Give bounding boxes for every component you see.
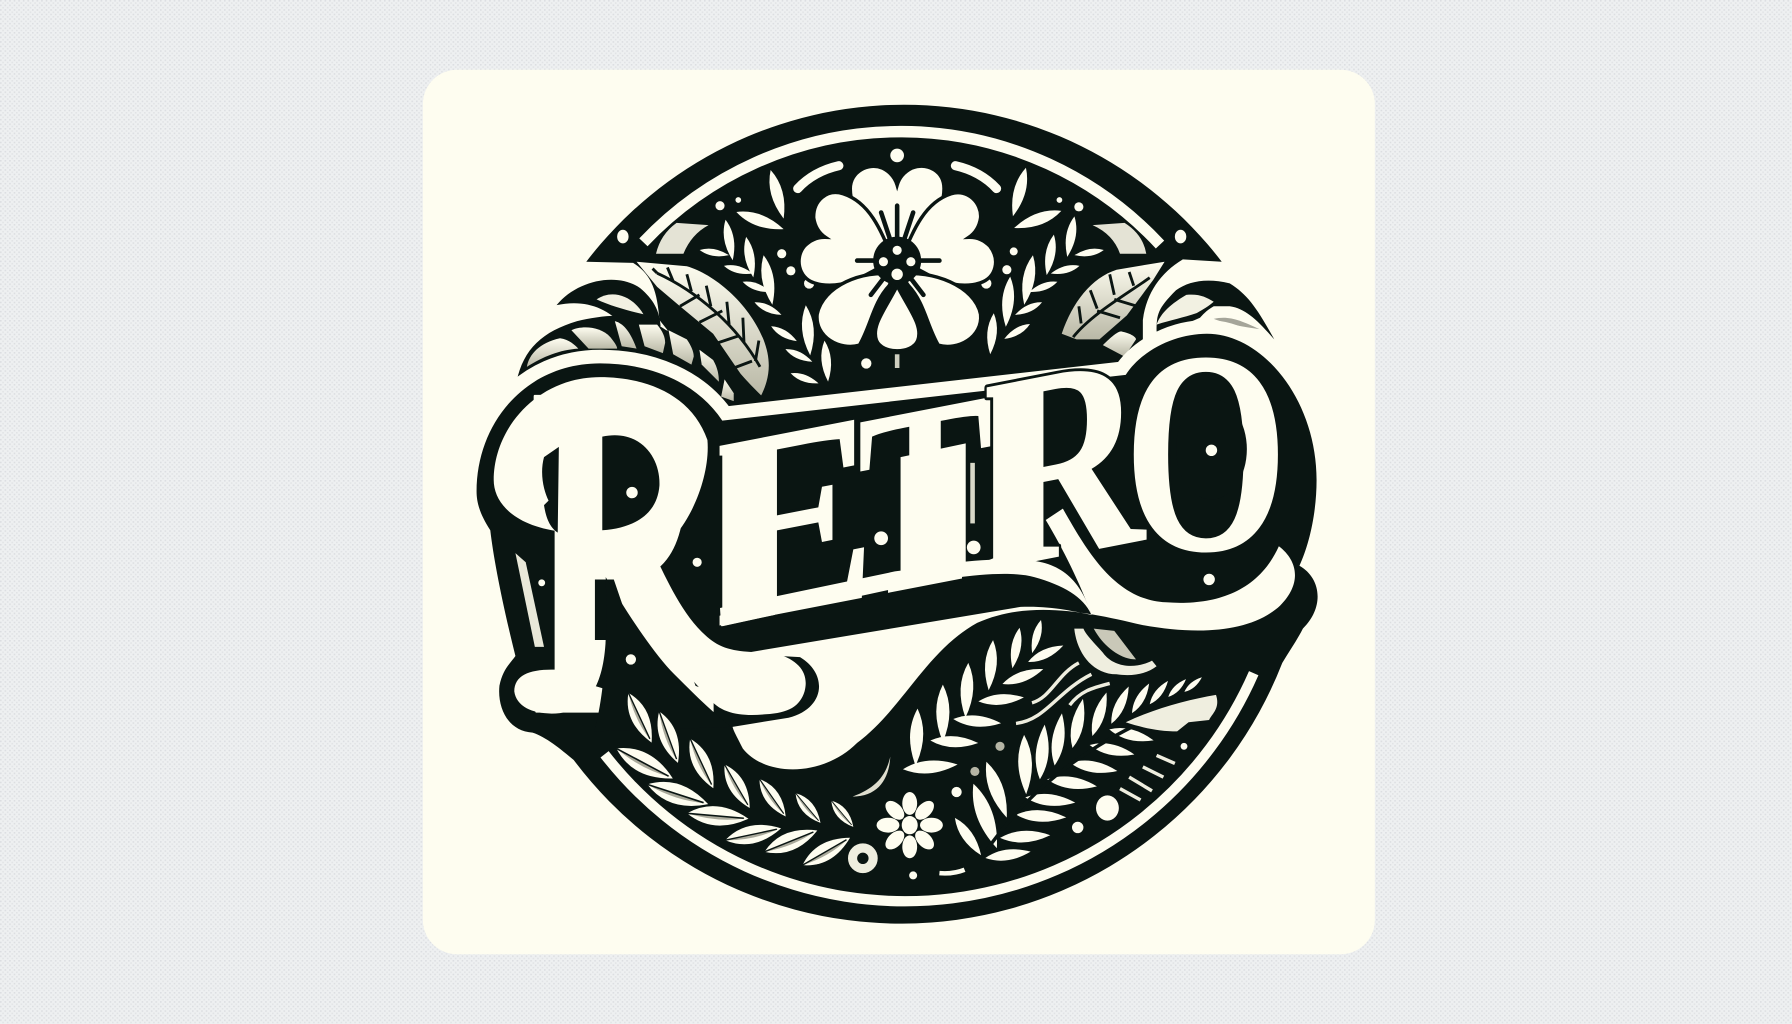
R counter	[602, 435, 659, 530]
wordmark RETRO: E	[715, 352, 876, 686]
bottom right feather	[951, 675, 1217, 863]
rope and leaf left	[517, 262, 769, 409]
wordmark RETRO: T	[857, 333, 993, 657]
crescent	[1074, 629, 1157, 675]
wordmark RETRO: R	[983, 291, 1147, 633]
R left sliver	[542, 447, 559, 533]
letter stem weights	[722, 385, 1043, 626]
top leaves left	[699, 169, 833, 387]
flourish: R top loop and foot curls	[494, 377, 806, 715]
bottom petal	[875, 286, 919, 351]
top leaves right	[985, 166, 1104, 355]
letter dots	[538, 487, 1215, 665]
dark letter silhouette with cream outline	[477, 334, 1318, 924]
top ornaments	[617, 149, 1186, 387]
cream card	[423, 70, 1375, 954]
top inner ring	[643, 132, 1160, 245]
top crescent	[557, 280, 661, 343]
bottom centre branch	[902, 619, 1065, 776]
wave under letters	[720, 560, 1091, 626]
large flower	[793, 166, 1001, 368]
hatched fans	[656, 223, 709, 254]
hatch and wavy lines	[1016, 663, 1175, 800]
wordmark RETRO: R	[530, 283, 714, 815]
slit between T and R	[970, 463, 975, 523]
small flower	[877, 792, 943, 858]
wordmark RETRO: O	[1123, 292, 1288, 613]
rope band	[517, 316, 737, 409]
bottom left branch	[612, 689, 857, 873]
stamens	[857, 206, 939, 295]
arc dashes	[798, 166, 997, 189]
frilled leaf tip	[1126, 695, 1217, 731]
bottom inner ring	[605, 673, 1254, 901]
left cream sliver	[515, 553, 544, 647]
flourish: swash tail under the wordmark	[733, 509, 1295, 769]
wordmark RETRO	[530, 283, 1288, 815]
top cap of badge	[586, 105, 1222, 425]
bottom ornaments	[853, 629, 1187, 879]
lower petals	[817, 274, 894, 346]
gap between R stem and leg	[594, 577, 731, 731]
flower centre dots	[879, 246, 915, 280]
rope and leaf right	[1062, 262, 1274, 357]
feather spine	[985, 693, 1216, 853]
ring dots	[617, 149, 1186, 369]
feather leaf	[637, 262, 769, 395]
O counter with dot	[1176, 399, 1247, 499]
